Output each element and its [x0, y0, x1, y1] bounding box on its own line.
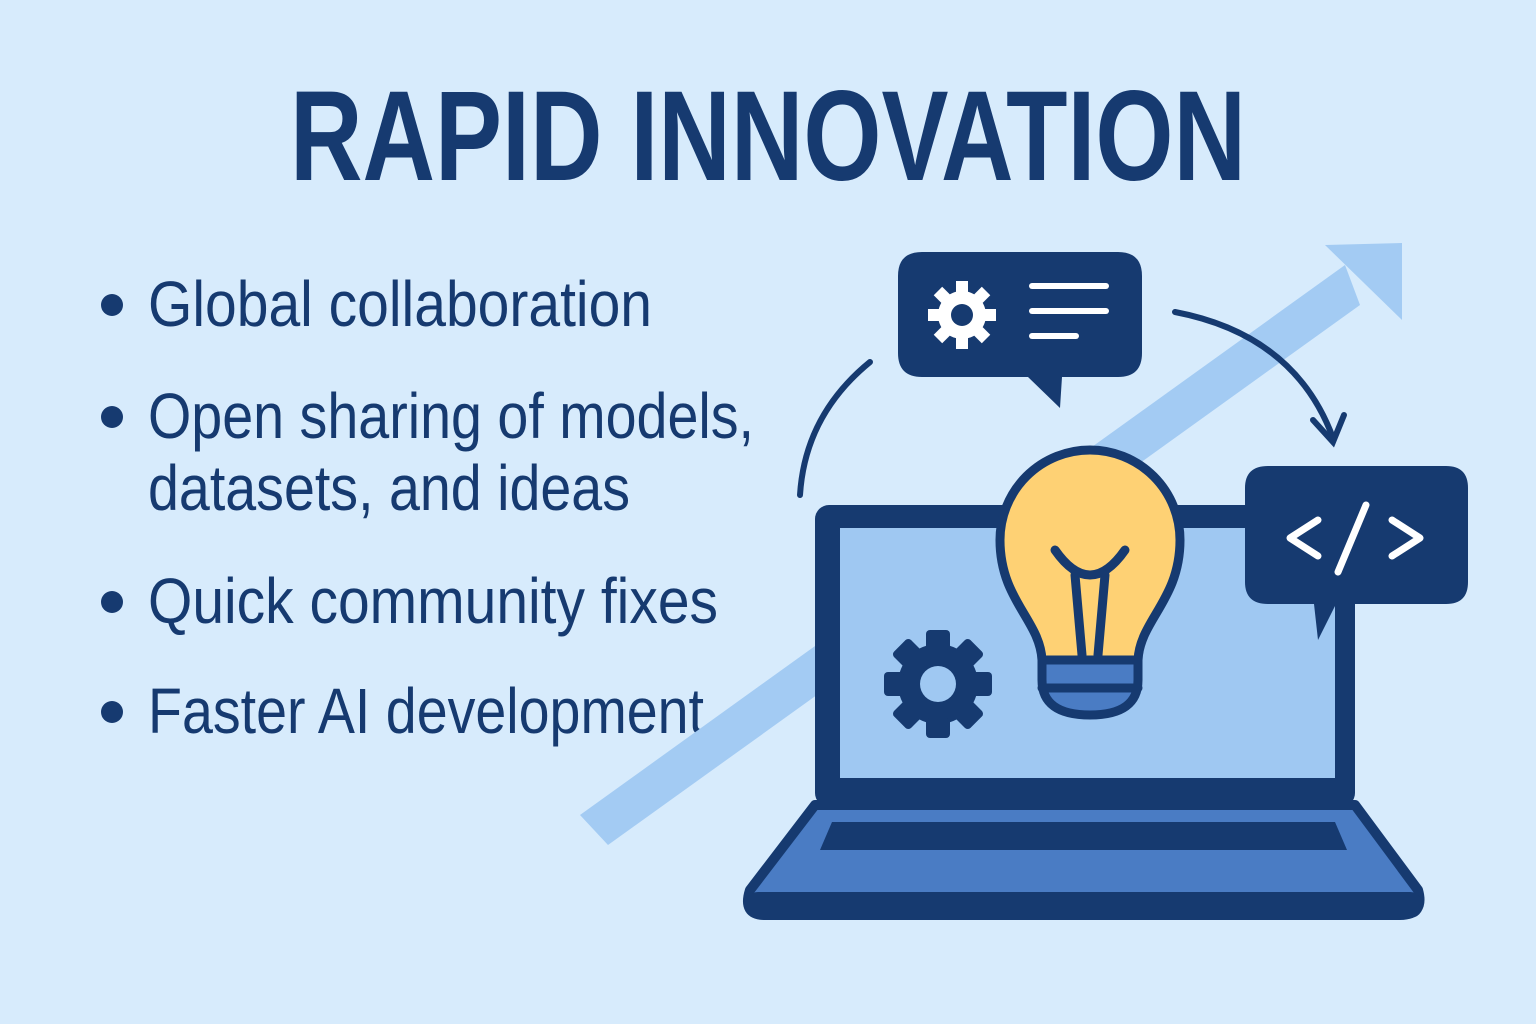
arrow: growth diagonal	[580, 243, 1402, 845]
bullet: global collaboration: Global collaboration	[148, 268, 652, 340]
bullet: quick fixes: Quick community fixes	[148, 565, 718, 637]
icon: light bulb	[1000, 450, 1180, 715]
bullet: faster AI: Faster AI development	[148, 675, 704, 747]
bullet: open sharing	[101, 380, 754, 524]
bullet list	[101, 268, 754, 747]
icon: gear on screen	[862, 608, 1014, 760]
bullet: open sharing: Open sharing of models,	[148, 380, 754, 452]
title: RAPID INNOVATION	[290, 65, 1246, 208]
arc arrows	[800, 312, 1344, 495]
bullet: open sharing: datasets, and ideas	[148, 452, 630, 524]
chat bubble: code	[1245, 466, 1468, 640]
laptop	[745, 505, 1423, 918]
chat bubble: settings	[898, 252, 1142, 408]
